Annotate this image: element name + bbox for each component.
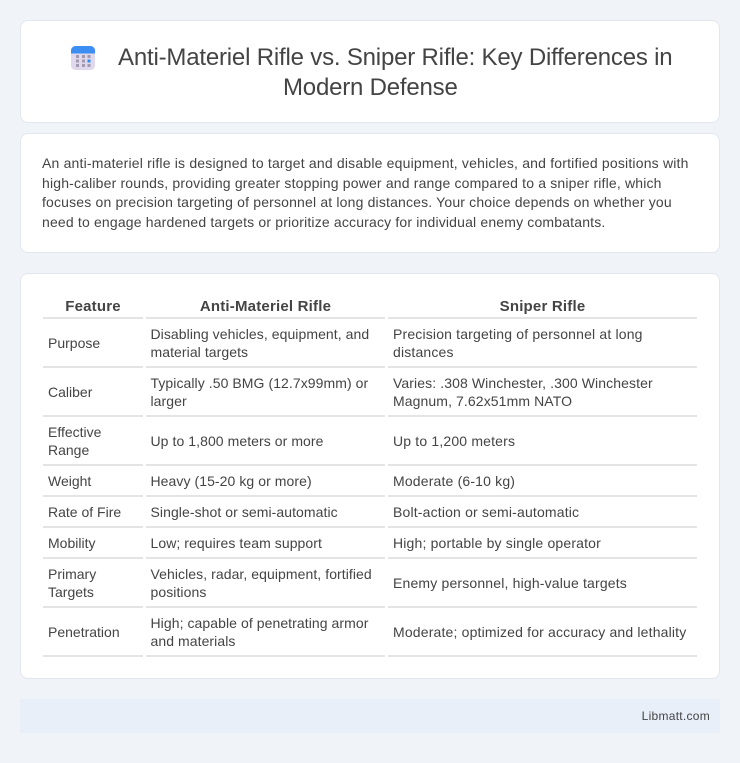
row: primary targets: Enemy personnel, high-value targets xyxy=(393,575,627,591)
row: primary targets: Targets xyxy=(48,584,94,600)
footer text: Libmatt.com xyxy=(642,709,710,723)
title xyxy=(118,44,672,101)
panel: title header: Modern Defense xyxy=(283,74,458,101)
panel: comparison table xyxy=(20,273,720,679)
row: purpose: Purpose xyxy=(48,335,100,351)
row: caliber: larger xyxy=(150,393,187,409)
row: mobility: Low; requires team support xyxy=(150,535,322,551)
panel: title header: Anti-Materiel Rifle vs. Sniper Rifle: Key Differences in xyxy=(118,44,672,71)
table header: Sniper Rifle xyxy=(500,298,585,315)
row: caliber: Varies: .308 Winchester, .300 Winchester xyxy=(393,375,653,391)
text block: introduction: An anti-materiel rifle is designed to target and disable equipment, vehicles, and fortified positions with xyxy=(42,155,689,171)
row: penetration xyxy=(48,615,686,649)
row: purpose: material targets xyxy=(150,344,248,360)
row: rate of fire: Bolt-action or semi-automatic xyxy=(393,504,579,520)
text block: introduction: focuses on precision targeting of personnel at long distances. Your choice depends on whether you xyxy=(42,194,672,210)
icon: calendar xyxy=(71,46,95,70)
row: effective range xyxy=(48,424,515,458)
footer bar xyxy=(20,699,720,733)
row: caliber xyxy=(48,375,653,409)
row: penetration: Moderate; optimized for accuracy and lethality xyxy=(393,624,686,640)
table header: Feature xyxy=(65,298,121,315)
table header xyxy=(65,298,585,315)
row: rate of fire xyxy=(48,504,579,520)
row: penetration: Penetration xyxy=(48,624,120,640)
row: rate of fire: Single-shot or semi-automatic xyxy=(150,504,338,520)
row: effective range: Range xyxy=(48,442,89,458)
row: caliber: Caliber xyxy=(48,384,92,400)
row: caliber: Typically .50 BMG (12.7x99mm) or xyxy=(150,375,368,391)
row: weight: Heavy (15-20 kg or more) xyxy=(150,473,312,489)
row: primary targets: Vehicles, radar, equipment, fortified xyxy=(150,566,372,582)
row: purpose: distances xyxy=(393,344,454,360)
row: rate of fire: Rate of Fire xyxy=(48,504,121,520)
row: effective range: Effective xyxy=(48,424,101,440)
text block: introduction: need to engage hardened targets or prioritize accuracy for individual enemy combatants. xyxy=(42,214,605,230)
row: mobility xyxy=(48,535,601,551)
panel: introduction xyxy=(20,133,720,253)
row: penetration: High; capable of penetrating armor xyxy=(150,615,368,631)
row: purpose: Precision targeting of personnel at long xyxy=(393,326,643,342)
row: weight xyxy=(48,473,515,489)
row: purpose xyxy=(48,326,643,360)
table header: Anti-Materiel Rifle xyxy=(200,298,331,315)
row: weight: Weight xyxy=(48,473,91,489)
panel: title header xyxy=(20,20,720,123)
row: primary targets: Primary xyxy=(48,566,96,582)
row: purpose: Disabling vehicles, equipment, and xyxy=(150,326,369,342)
row: caliber: Magnum, 7.62x51mm NATO xyxy=(393,393,572,409)
row: effective range: Up to 1,200 meters xyxy=(393,433,515,449)
text block: introduction: high-caliber rounds, providing greater stopping power and range compared to a sniper rifle, which xyxy=(42,175,662,191)
row: primary targets xyxy=(48,566,627,600)
row: primary targets: positions xyxy=(150,584,206,600)
row: mobility: High; portable by single operator xyxy=(393,535,601,551)
row: mobility: Mobility xyxy=(48,535,95,551)
text block: introduction xyxy=(42,155,689,230)
row: weight: Moderate (6-10 kg) xyxy=(393,473,515,489)
row: penetration: and materials xyxy=(150,633,235,649)
row: effective range: Up to 1,800 meters or more xyxy=(150,433,324,449)
